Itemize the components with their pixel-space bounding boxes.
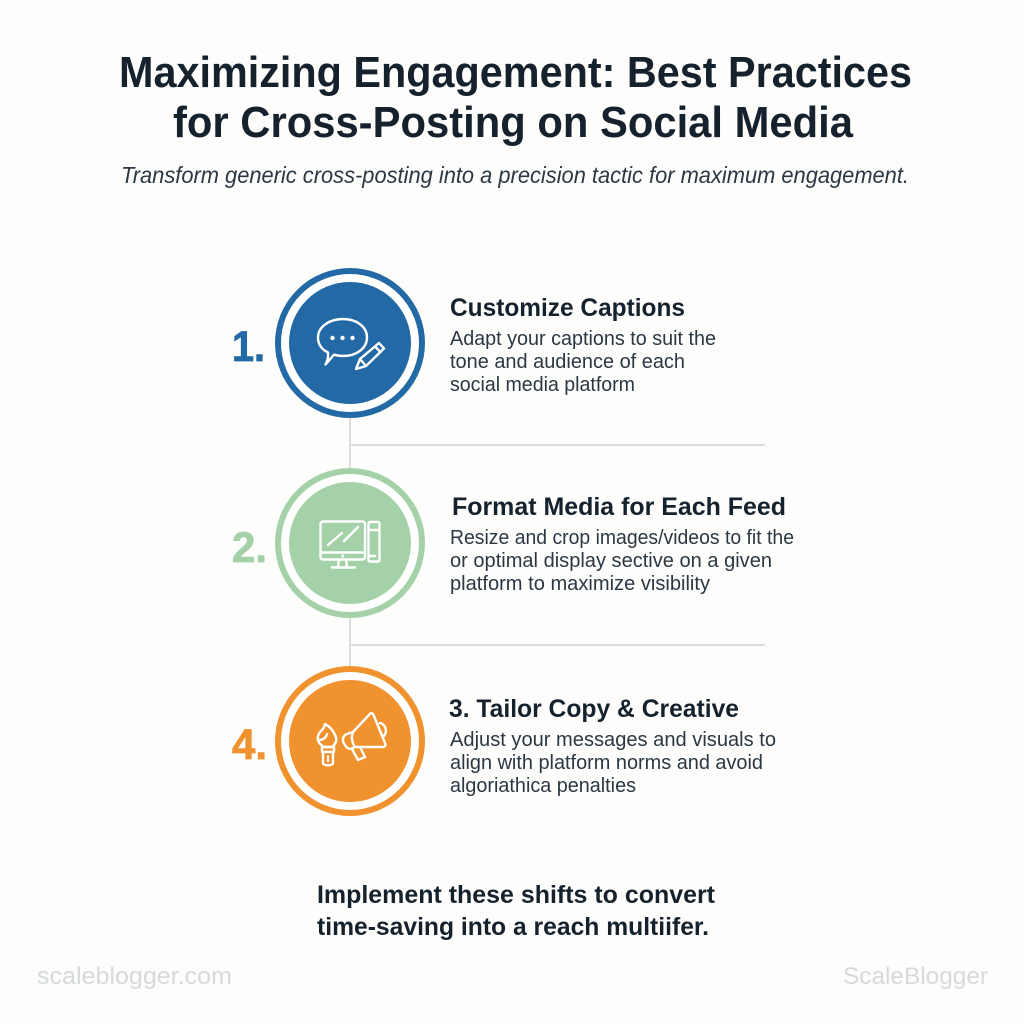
step 2 number: 2.	[232, 524, 267, 572]
icon: desktop computer	[320, 522, 380, 568]
step 1 text: Adapt your captions to suit the	[450, 328, 716, 350]
step 2 badge	[278, 471, 422, 615]
step 1 text	[450, 294, 716, 396]
title: for Cross-Posting on Social Media	[173, 98, 854, 147]
step 1 text: social media platform	[450, 374, 635, 396]
closing statement: Implement these shifts to convert	[317, 881, 716, 909]
icon: speech bubble and pencil	[318, 319, 384, 369]
step 1 badge	[278, 271, 422, 415]
icon: torch brush and megaphone	[318, 713, 386, 765]
step 2	[232, 471, 794, 615]
step 3 text: 3. Tailor Copy & Creative	[449, 695, 739, 723]
watermark: brand: ScaleBlogger	[843, 963, 988, 990]
closing statement	[317, 881, 716, 941]
closing statement: time-saving into a reach multiifer.	[317, 913, 709, 941]
step 3 number: 4.	[232, 721, 267, 769]
step 3 text: algoriathica penalties	[450, 775, 636, 797]
step 3 text: align with platform norms and avoid	[450, 752, 763, 774]
step 1	[232, 271, 716, 415]
step 2 text: or optimal display sective on a given	[450, 550, 772, 572]
title	[119, 48, 912, 147]
title: Maximizing Engagement: Best Practices	[119, 48, 912, 97]
step 2 text: platform to maximize visibility	[450, 573, 710, 595]
step 2 text: Format Media for Each Feed	[452, 493, 786, 521]
step 2 text	[450, 493, 794, 595]
step 1 text: Customize Captions	[450, 294, 685, 322]
step 3	[232, 669, 776, 813]
step 1 number: 1.	[232, 323, 265, 371]
step 3 badge	[278, 669, 422, 813]
step 3 text	[449, 695, 776, 797]
step 1 text: tone and audience of each	[450, 351, 685, 373]
step 3 text: Adjust your messages and visuals to	[450, 729, 776, 751]
watermark: domain: scaleblogger.com	[37, 963, 232, 990]
step 2 text: Resize and crop images/videos to fit the	[450, 527, 794, 549]
timeline connectors	[350, 415, 765, 672]
subtitle: Transform generic cross-posting into a precision tactic for maximum engagement.	[121, 162, 909, 188]
